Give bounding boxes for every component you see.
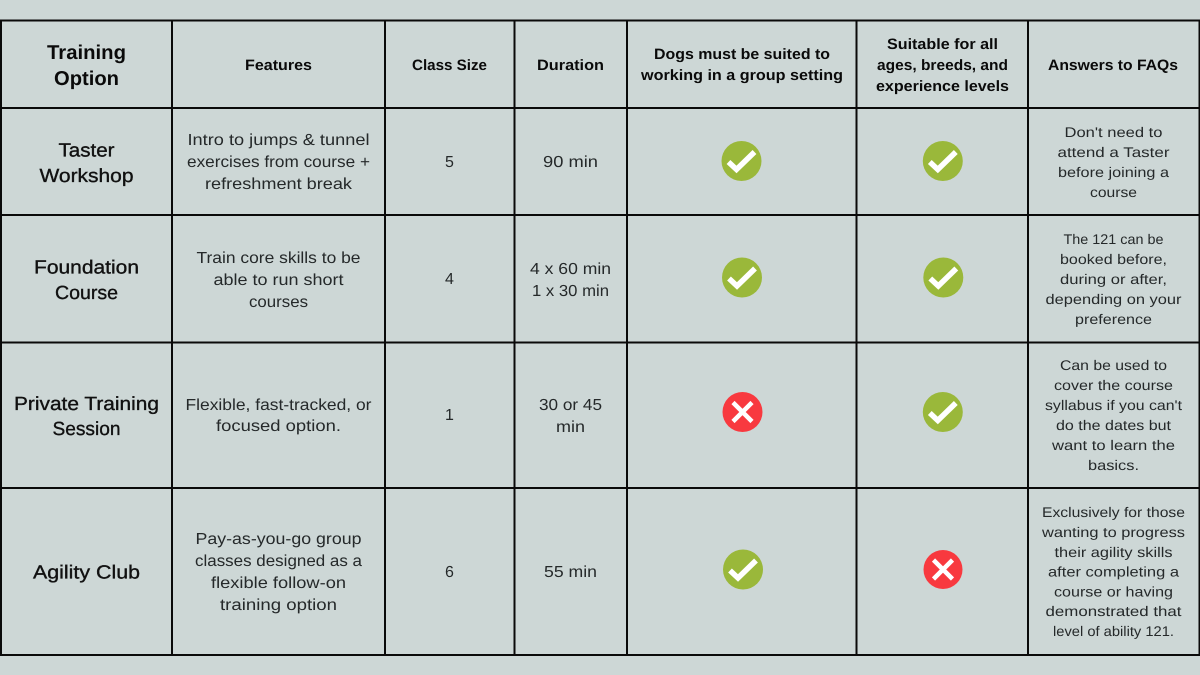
FAQ answer: The 121 can be [1064,231,1164,247]
duration: 4 x 60 min [530,261,611,278]
icon: cross [924,550,962,589]
FAQ answer: cover the course [1054,377,1173,393]
heading: suitable for all: ages, breeds, and [877,57,1008,74]
option name [40,140,134,187]
heading: Class Size: Class Size [412,57,487,74]
heading: suitable for all: Suitable for all [887,36,998,53]
features: training option [220,597,337,614]
option name: Taster [58,140,115,162]
duration [539,397,602,436]
duration [530,261,611,300]
duration: 55 min [544,564,597,581]
icon: check [923,258,963,298]
FAQ answer: depending on your [1046,291,1182,307]
option name: Workshop [40,166,134,187]
FAQ answer [1058,124,1170,200]
features: focused option. [216,418,341,435]
FAQ answer: want to learn the [1051,437,1175,453]
option name: Foundation [34,258,139,278]
features: Flexible, fast-tracked, or [186,397,372,414]
features: exercises from course + [187,154,370,171]
heading: Answers to FAQs: Answers to FAQs [1048,57,1178,74]
class size: 4 [445,271,454,288]
class size: 5 [445,154,454,171]
features: refreshment break [205,176,353,193]
features: able to run short [214,272,344,289]
option name: Private Training [14,394,159,415]
heading: suitable for all: experience levels [876,78,1009,95]
FAQ answer: do the dates but [1056,417,1171,433]
option name [14,394,159,440]
FAQ answer: Don't need to [1064,124,1163,140]
heading: Features: Features [245,57,312,74]
icon: check [923,141,963,181]
features [195,531,362,614]
FAQ answer: preference [1075,311,1152,327]
FAQ answer: their agility skills [1054,544,1172,560]
heading: group setting: working in a group setting [640,67,843,84]
features: flexible follow-on [211,575,346,592]
duration: 1 x 30 min [532,283,609,300]
FAQ answer: basics. [1088,457,1139,473]
FAQ answer: wanting to progress [1041,524,1185,540]
FAQ answer [1041,504,1185,639]
class size: 6 [445,564,454,581]
FAQ answer: before joining a [1058,164,1169,180]
heading: Training Option: Option [54,68,119,90]
features: classes designed as a [195,553,362,570]
icon: check [722,258,762,298]
features: Pay-as-you-go group [196,531,362,548]
features [187,132,370,193]
row: Taster Workshop [40,124,1170,200]
features: courses [249,294,308,311]
heading: Training Option: Training [47,42,126,64]
option name: Agility Club [33,562,140,584]
FAQ answer: course [1090,184,1137,200]
FAQ answer: after completing a [1048,564,1179,580]
icon: check [723,550,763,590]
duration: 90 min [543,154,598,171]
FAQ answer: attend a Taster [1058,144,1170,160]
class size: 1 [445,407,454,424]
features: Train core skills to be [196,250,361,267]
heading: Duration: Duration [537,57,604,74]
row: Foundation Course [34,231,1182,327]
icon: check [923,392,963,432]
heading: Training Option [47,42,126,90]
FAQ answer: demonstrated that [1046,603,1182,619]
heading: suitable for all [876,36,1009,95]
FAQ answer: during or after, [1060,271,1167,287]
FAQ answer: Can be used to [1060,357,1167,373]
FAQ answer: booked before, [1060,251,1167,267]
icon: check [722,141,762,181]
heading: group setting: Dogs must be suited to [654,46,830,63]
duration: min [556,419,585,436]
heading: group setting [640,46,843,84]
option name: Course [55,283,118,304]
FAQ answer [1046,231,1182,327]
FAQ answer [1045,357,1182,473]
FAQ answer: level of ability 121. [1053,623,1174,639]
header row [47,36,1178,95]
row: Private Training Session [14,357,1182,473]
duration: 30 or 45 [539,397,602,414]
features [196,250,361,311]
features [186,397,372,435]
FAQ answer: course or having [1054,584,1173,600]
row: Agility Club [33,504,1185,639]
FAQ answer: Exclusively for those [1042,504,1185,520]
features: Intro to jumps & tunnel [188,132,370,149]
option name [34,258,139,304]
option name: Session [52,419,120,440]
icon: cross [722,392,762,432]
FAQ answer: syllabus if you can't [1045,397,1182,413]
